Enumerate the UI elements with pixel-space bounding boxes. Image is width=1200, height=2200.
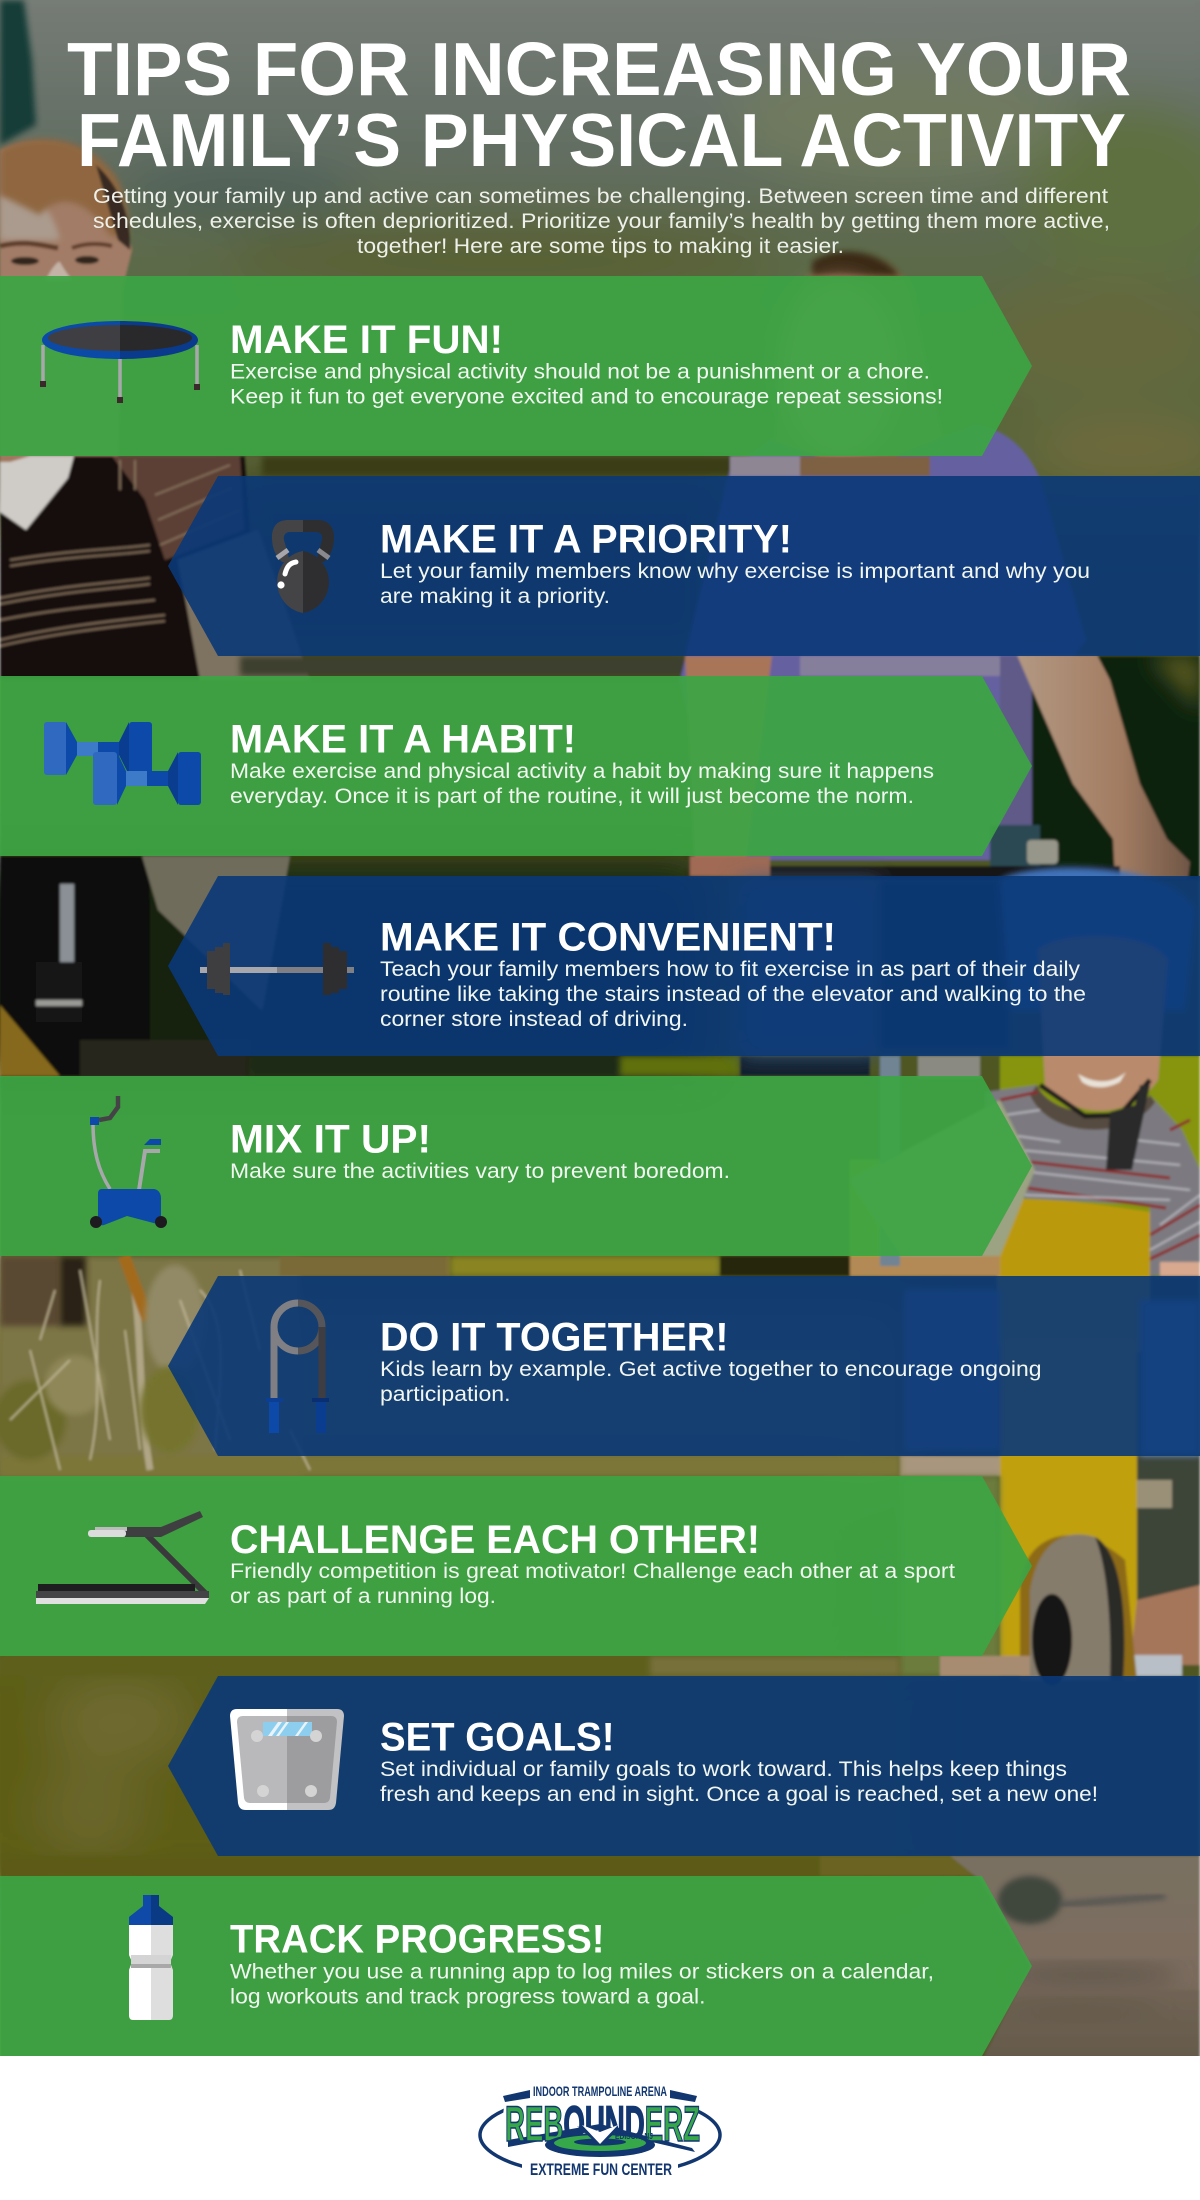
intro paragraph: Getting your family up and active can sometimes be challenging. Between screen time and different (93, 184, 1108, 208)
banner: make it fun (0, 276, 1032, 456)
body text: or as part of a running log. (230, 1585, 496, 1608)
banner shape (0, 676, 1032, 856)
banner shape (0, 1876, 1032, 2056)
banner: set goals (168, 1676, 1200, 1856)
icon: trampoline (40, 321, 200, 403)
heading: CHALLENGE EACH OTHER! (230, 1518, 760, 1562)
icon: water bottle (129, 1895, 173, 2020)
intro paragraph: schedules, exercise is often deprioritized. Prioritize your family’s health by getting them more active, (93, 209, 1110, 233)
banner shape (168, 876, 1200, 1056)
intro paragraph (93, 184, 1110, 258)
body text (380, 560, 1090, 608)
intro paragraph: together! Here are some tips to making it easier. (357, 234, 844, 258)
heading: MAKE IT FUN! (230, 318, 503, 362)
banner shape (0, 1476, 1032, 1656)
logo: Rebounderz Extreme Fun Center (480, 2083, 720, 2180)
body text: Keep it fun to get everyone excited and to encourage repeat sessions! (230, 386, 943, 408)
logo: Rebounderz Extreme Fun Center: REBOUNDERZ (505, 2096, 700, 2152)
body text (230, 1560, 955, 1608)
body text: Let your family members know why exercise is important and why you (380, 560, 1090, 583)
woman (680, 252, 1200, 880)
heading: MIX IT UP! (230, 1118, 431, 1162)
body text (230, 360, 943, 408)
banner: challenge each other (0, 1476, 1032, 1656)
body text (230, 760, 934, 808)
icon: treadmill (36, 1511, 209, 1604)
grass field (0, 1256, 900, 1876)
title (67, 27, 1131, 182)
wheel (1020, 1535, 1137, 1680)
banner: track progress (0, 1876, 1032, 2056)
body text: fresh and keeps an end in sight. Once a goal is reached, set a new one! (380, 1783, 1098, 1806)
body text: Friendly competition is great motivator! Challenge each other at a sport (230, 1560, 955, 1583)
banner shape (0, 1076, 1032, 1256)
icon: kettlebell (272, 520, 334, 613)
heading: MAKE IT CONVENIENT! (380, 916, 836, 960)
banner: make it a habit (0, 676, 1032, 856)
logo: Rebounderz Extreme Fun Center: INDOOR TRAMPOLINE ARENA (533, 2083, 667, 2099)
banner: make it convenient (168, 876, 1200, 1056)
heading: DO IT TOGETHER! (380, 1316, 728, 1360)
banner shape (168, 1676, 1200, 1856)
body text: Set individual or family goals to work toward. This helps keep things (380, 1758, 1067, 1781)
icon: barbell (200, 943, 354, 995)
body text: Whether you use a running app to log miles or stickers on a calendar, (230, 1960, 934, 1984)
heading: MAKE IT A HABIT! (230, 718, 576, 762)
logo: Rebounderz Extreme Fun Center: EDISON, NJ (615, 2132, 653, 2141)
title: FAMILY’S PHYSICAL ACTIVITY (77, 98, 1126, 182)
man's trousers and bicycle (0, 856, 1010, 1076)
body text: Exercise and physical activity should not be a punishment or a chore. (230, 360, 930, 384)
body text: Make exercise and physical activity a habit by making sure it happens (230, 760, 934, 783)
body text (230, 1960, 934, 2008)
body text: Teach your family members how to fit exercise in as part of their daily (380, 958, 1081, 981)
icon: jump rope (266, 1303, 329, 1433)
dark tree (0, 0, 36, 145)
banner: do it together (168, 1276, 1200, 1456)
banner: make it a priority (168, 476, 1200, 656)
striped shirt (985, 1085, 1200, 1276)
body text: everyday. Once it is part of the routine, it will just become the norm. (230, 785, 914, 808)
logo: Rebounderz Extreme Fun Center: EXTREME FUN CENTER (530, 2160, 672, 2179)
body text: participation. (380, 1383, 510, 1406)
body text: Make sure the activities vary to prevent boredom. (230, 1160, 730, 1183)
icon: exercise bike (90, 1096, 167, 1228)
heading: MAKE IT A PRIORITY! (380, 518, 792, 562)
body text: are making it a priority. (380, 585, 610, 608)
body text: log workouts and track progress toward a goal. (230, 1986, 706, 2008)
banner shape (168, 476, 1200, 656)
dark foliage (1000, 656, 1200, 880)
body text (380, 958, 1086, 1031)
title: TIPS FOR INCREASING YOUR (67, 27, 1131, 111)
dirt path (820, 1856, 1200, 2058)
man (0, 139, 742, 680)
banner shape (168, 1276, 1200, 1456)
heading: TRACK PROGRESS! (230, 1918, 604, 1962)
body text: Kids learn by example. Get active together to encourage ongoing (380, 1358, 1042, 1381)
banner shape (0, 276, 1032, 456)
child on balance bike (850, 868, 1200, 1686)
icon: bathroom scale (230, 1709, 344, 1810)
banner: mix it up (0, 1076, 1032, 1256)
heading: SET GOALS! (380, 1716, 614, 1760)
body text (380, 1358, 1042, 1406)
body text (380, 1758, 1098, 1806)
icon: dumbbells (44, 722, 201, 805)
body text: corner store instead of driving. (380, 1008, 688, 1031)
body text: routine like taking the stairs instead of the elevator and walking to the (380, 983, 1086, 1006)
footer (0, 2056, 1200, 2200)
